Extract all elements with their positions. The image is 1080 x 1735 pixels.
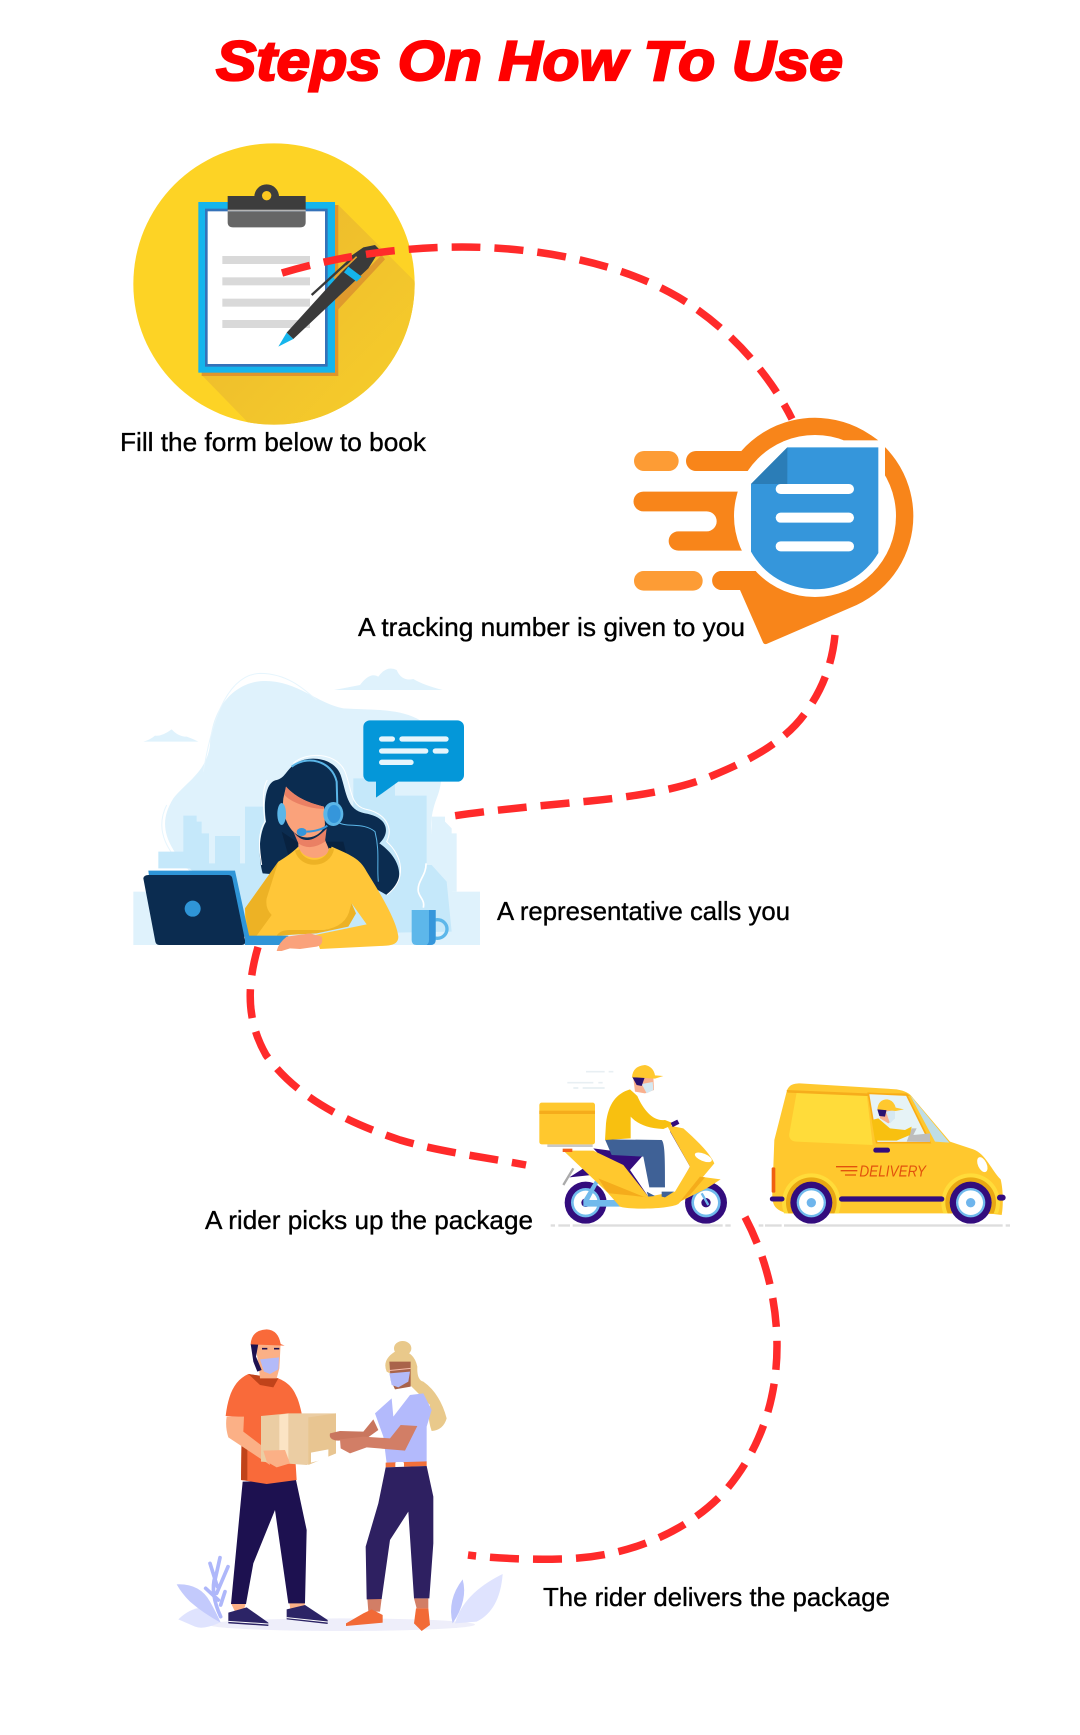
icon: orange tracking pin with document <box>634 418 913 644</box>
label: step 3: A representative calls you <box>497 896 790 926</box>
label: step 4: A rider picks up the package <box>205 1205 533 1235</box>
arrow: dashed path from step 4 to step 5 <box>468 1217 777 1559</box>
illustration: scooter rider <box>539 1065 731 1227</box>
label: step 5: The rider delivers the package <box>543 1582 890 1612</box>
arrow: dashed path from step 3 to step 4 <box>250 947 526 1165</box>
label: step 2: A tracking number is given to you <box>358 612 745 642</box>
illustration: call centre representative <box>133 668 480 951</box>
arrow: dashed path from step 2 to step 3 <box>447 635 835 817</box>
illustration: rider delivers package to customer <box>177 1329 503 1631</box>
label: step 1: Fill the form below to book <box>120 427 427 457</box>
icon: clipboard in yellow circle <box>133 143 430 440</box>
arrow: dashed path from step 1 to step 2 <box>282 247 792 419</box>
illustration: delivery van: DELIVERY <box>859 1164 928 1181</box>
illustration: delivery van <box>759 1083 1010 1232</box>
title: Steps On How To Use <box>216 29 843 92</box>
